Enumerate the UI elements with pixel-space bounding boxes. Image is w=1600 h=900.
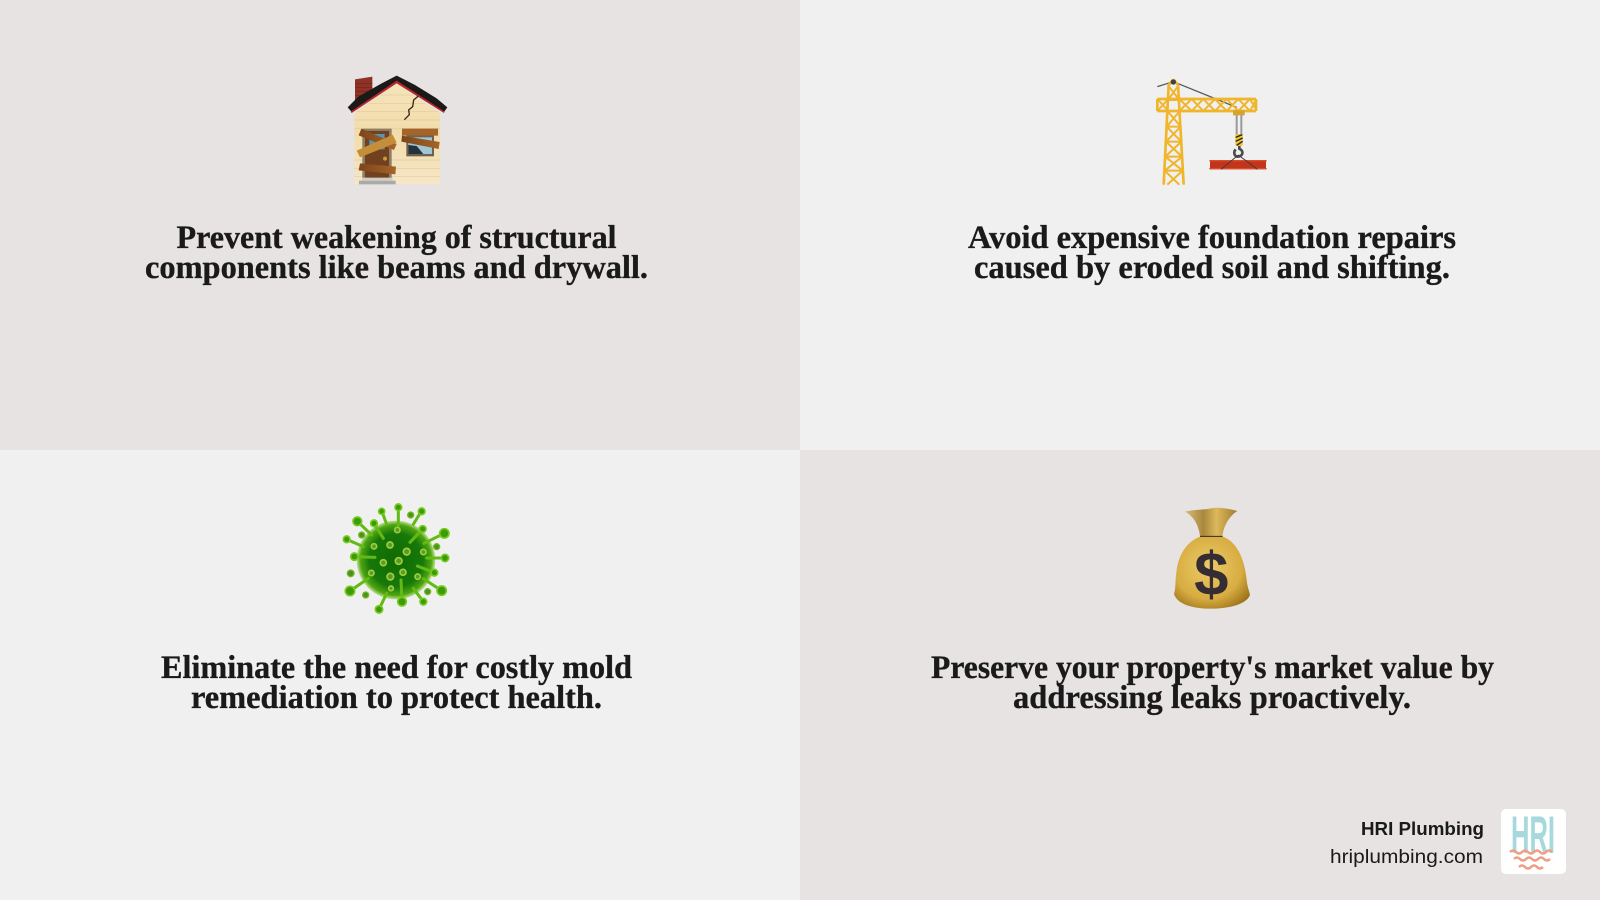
icon: green mold spore xyxy=(342,503,450,614)
icon: money bag xyxy=(1174,508,1250,609)
icon: money bag: $ xyxy=(1194,540,1228,609)
heading: mold remediation: Eliminate the need for costly mold xyxy=(161,650,632,686)
heading: market value: addressing leaks proactively. xyxy=(1013,680,1411,716)
heading: mold remediation: remediation to protect health. xyxy=(191,680,602,716)
heading: market value: Preserve your property's market value by xyxy=(931,650,1494,686)
logo: HRI Plumbing badge: HRI xyxy=(1511,806,1555,865)
heading: structural components xyxy=(145,220,648,286)
logo: HRI Plumbing badge xyxy=(1501,806,1566,874)
heading: structural components: components like beams and drywall. xyxy=(145,250,648,286)
footer: company name and website xyxy=(1330,818,1484,868)
panel: market value xyxy=(800,450,1600,900)
footer: company name and website: HRI Plumbing xyxy=(1361,818,1484,839)
icon: damaged boarded-up house xyxy=(348,76,448,184)
panel: structural components xyxy=(0,0,800,450)
heading: market value xyxy=(931,650,1494,716)
heading: structural components: Prevent weakening of structural xyxy=(176,220,616,256)
heading: foundation repairs xyxy=(968,220,1456,286)
footer: company name and website: hriplumbing.com xyxy=(1330,846,1483,868)
heading: foundation repairs: caused by eroded soil and shifting. xyxy=(974,250,1450,286)
heading: mold remediation xyxy=(161,650,632,716)
panel: foundation repairs xyxy=(800,0,1600,450)
heading: foundation repairs: Avoid expensive foundation repairs xyxy=(968,220,1456,256)
icon: construction crane lifting a beam xyxy=(1156,78,1267,186)
panel: mold remediation xyxy=(0,450,800,900)
